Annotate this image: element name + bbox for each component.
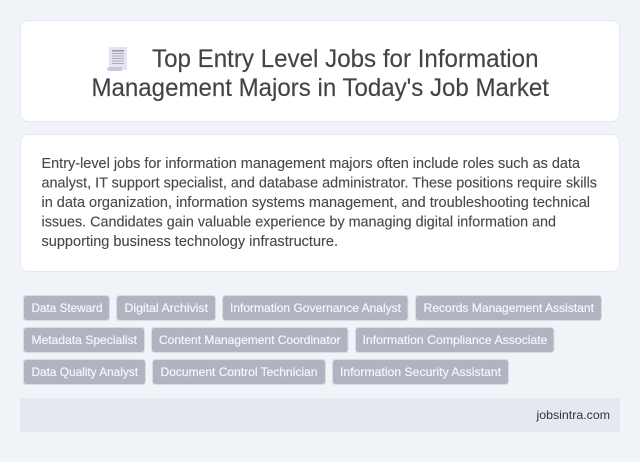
tag: Information Governance Analyst <box>222 296 408 320</box>
tag: Information Compliance Associate: Information Compliance Associate <box>362 333 548 347</box>
tag: Records Management Assistant: Records Management Assistant <box>424 301 595 315</box>
title: Top Entry Level Jobs for Information <box>152 45 538 73</box>
tag: Data Steward <box>24 296 110 320</box>
text block: description: in data organization, information systems management, and troubleshooting technical <box>42 195 590 211</box>
footer <box>20 398 620 432</box>
tag: Data Quality Analyst: Data Quality Analyst <box>32 365 139 379</box>
tag: Digital Archivist <box>116 296 216 320</box>
footer source text: jobsintra.com <box>535 408 610 422</box>
tag: Content Management Coordinator <box>152 328 348 352</box>
tag: Metadata Specialist <box>24 328 144 352</box>
tag: Digital Archivist: Digital Archivist <box>124 301 209 315</box>
tag: Metadata Specialist: Metadata Specialist <box>32 333 138 347</box>
tag: Content Management Coordinator: Content Management Coordinator <box>159 333 340 347</box>
text block: description: Entry-level jobs for information management majors often include roles such as data <box>42 156 581 172</box>
tag list <box>24 296 602 384</box>
icon: paper scroll <box>107 47 127 71</box>
tag: Information Governance Analyst: Information Governance Analyst <box>230 301 402 315</box>
tag: Document Control Technician: Document Control Technician <box>160 365 318 379</box>
tag: Data Quality Analyst <box>24 360 146 384</box>
title: Management Majors in Today's Job Market <box>92 74 549 102</box>
text block: description <box>42 156 597 250</box>
tag: Information Security Assistant <box>332 360 508 384</box>
tag: Data Steward: Data Steward <box>32 301 102 315</box>
tag: Records Management Assistant <box>416 296 602 320</box>
tag: Document Control Technician <box>152 360 326 384</box>
panel: title card <box>20 20 620 122</box>
title <box>92 45 549 102</box>
text block: description: analyst, IT support specialist, and database administrator. These positions require skills <box>42 176 597 192</box>
tag: Information Security Assistant: Information Security Assistant <box>340 365 502 379</box>
panel: description <box>20 134 620 272</box>
text block: description: issues. Candidates gain valuable experience by managing digital information and <box>42 214 556 230</box>
text block: description: supporting business technology infrastructure. <box>42 234 338 250</box>
tag: Information Compliance Associate <box>356 328 554 352</box>
